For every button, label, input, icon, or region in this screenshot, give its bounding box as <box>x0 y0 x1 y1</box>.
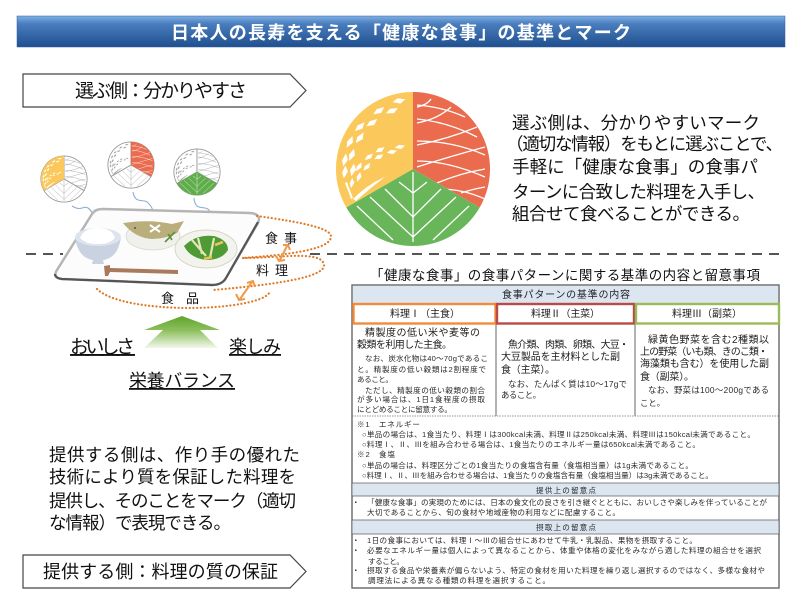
heading arrow: providing side: 提供する側：料理の質の保証 <box>43 562 278 582</box>
icon: green upward arrow <box>144 316 220 348</box>
column text: staple: ただし、精製度の低い穀類の割合 <box>365 385 485 395</box>
label: deliciousness: おいしさ <box>70 337 135 358</box>
column text: main dish: 食（主菜）。 <box>501 364 555 376</box>
text: intake notes: 調理法による異なる種類の料理を選択すること。 <box>368 575 550 585</box>
text: intake notes: ・ <box>352 536 360 545</box>
notes: energy and salt: ○料理Ⅰ、Ⅱ、Ⅲを組み合わせる場合は、1食当たりの食塩含有量（食塩相当量）は3g未満であること。 <box>362 470 713 480</box>
heading arrow: choosing side: 選ぶ側：分かりやすさ <box>75 80 247 102</box>
column text: side dish: 食（副菜）。 <box>640 371 694 383</box>
table header band <box>353 286 778 303</box>
main dish sector <box>413 92 490 208</box>
text: provision notes: 「健康な食事」の実現のためには、日本の食文化の良さを引き継ぐとともに、おいしさや楽しみを伴っていることが <box>367 497 767 507</box>
column text: side dish: 海藻類も含む）を使用した副 <box>640 357 769 370</box>
vegetable plate <box>175 230 237 268</box>
text: provision notes <box>352 497 767 517</box>
illustration: meal tray <box>55 209 259 285</box>
column text: staple: あること。 <box>357 375 393 384</box>
column text: main dish: あること。 <box>501 390 541 400</box>
column text: staple: 精製度の低い米や麦等の <box>365 326 480 339</box>
large healthy meal mark <box>336 92 490 246</box>
notes: energy and salt: ※1 エネルギー <box>357 420 420 429</box>
table heading: 「健康な食事」の食事パターンに関する基準の内容と留意事項 <box>370 267 760 283</box>
text block: choosing side: （適切な情報）をもとに選ぶことで、 <box>506 134 783 154</box>
icon: main dish mark <box>108 142 154 188</box>
text block: choosing side: 組合せて食べることができる。 <box>512 204 750 224</box>
title bar: 日本人の長寿を支える「健康な食事」の基準とマーク <box>171 22 631 43</box>
connector lines from marks to dishes <box>72 192 212 232</box>
column text: side dish <box>640 333 769 408</box>
column head: staple: 料理Ⅰ（主食） <box>390 307 460 320</box>
dotted loops: food, dish, meal <box>97 216 331 308</box>
tray <box>55 209 259 285</box>
text: intake notes: ・ <box>352 546 360 555</box>
label: nutrition balance: 栄養バランス <box>129 371 235 391</box>
text block: choosing side <box>506 113 783 224</box>
label: food: 食 品 <box>161 291 199 306</box>
text block: providing side <box>49 445 300 533</box>
column text: side dish: 上の野菜（いも類、きのこ類・ <box>640 346 768 358</box>
standards table <box>352 285 779 588</box>
text block: providing side: 提供し、そのことをマーク（適切 <box>49 491 296 511</box>
text: intake notes: すること。 <box>368 557 404 566</box>
column head: staple <box>354 304 496 324</box>
label: dish: 料 理 <box>256 263 288 278</box>
band: provision notes: 提供上の留意点 <box>536 485 596 495</box>
text block: choosing side: 手軽に「健康な食事」の食事パ <box>512 157 758 177</box>
label: meal: 食 事 <box>265 231 297 246</box>
column text: main dish <box>501 338 629 400</box>
column text: main dish: 魚介類、肉類、卵類、大豆・ <box>508 338 629 351</box>
column text: side dish: なお、野菜は100～200gである <box>648 385 769 395</box>
marks: three small logos <box>41 142 220 202</box>
side dish sector <box>346 169 480 246</box>
band: intake notes: 摂取上の留意点 <box>536 522 596 532</box>
text: intake notes: 1日の食事においては、料理Ⅰ～Ⅲの組合せにあわせて牛乳・乳製品、果物を摂取すること。 <box>367 535 697 545</box>
column text: staple: なお、炭水化物は40～70gであるこ <box>365 353 488 363</box>
column head: side dish <box>636 304 779 324</box>
grilled fish plate <box>123 221 184 250</box>
text block: providing side: 提供する側は、作り手の優れた <box>49 445 300 465</box>
text: intake notes <box>352 535 765 585</box>
heading arrow: choosing side <box>23 74 306 107</box>
rice sector <box>336 92 413 208</box>
bowl of rice <box>75 228 121 264</box>
notes: energy and salt: ※2 食塩 <box>357 449 395 459</box>
column head: main dish: 料理Ⅱ（主菜） <box>531 307 600 320</box>
text block: choosing side: ターンに合致した料理を入手し、 <box>512 182 765 202</box>
icon: side dish mark <box>174 149 220 195</box>
text: intake notes: 摂取する食品や栄養素が偏らないよう、特定の食材を用いた料理を繰り返し選択するのではなく、多様な食材や <box>367 565 765 575</box>
column text: side dish: 緑黄色野菜を含む2種類以 <box>648 333 769 346</box>
table header band: 食事パターンの基準の内容 <box>502 288 630 301</box>
band: provision notes <box>352 483 779 496</box>
column text: staple: と。精製度の低い穀類は2割程度で <box>357 364 486 374</box>
notes: energy and salt: ○単品の場合は、料理区分ごとの1食当たりの食塩含有量（食塩相当量）は1g未満であること。 <box>362 460 693 470</box>
column text: staple: が多い場合は、1日1食程度の摂取 <box>357 394 485 404</box>
column text: staple: 穀類を利用した主食。 <box>357 338 452 351</box>
column head: side dish: 料理Ⅲ（副菜） <box>672 307 742 320</box>
column text: main dish: 大豆製品を主材料とした副 <box>501 350 620 363</box>
column head: main dish <box>497 304 634 324</box>
text block: choosing side: 選ぶ側は、分かりやすいマーク <box>512 113 760 133</box>
notes: energy and salt <box>357 420 755 480</box>
column text: staple <box>357 326 488 414</box>
double arrows between levels <box>236 245 290 300</box>
chopsticks <box>104 265 178 276</box>
column text: side dish: こと。 <box>640 398 665 408</box>
heading arrow: providing side <box>23 555 306 588</box>
band: intake notes <box>352 520 779 534</box>
text block: providing side: な情報）で表現できる。 <box>49 513 231 533</box>
icon: staple food mark <box>41 156 87 202</box>
text: provision notes: 大切であることから、旬の食材や地域産物の利用などに配慮すること。 <box>367 507 620 517</box>
text block: providing side: 技術により質を保証した料理を <box>49 467 296 487</box>
title bar <box>17 16 785 47</box>
notes: energy and salt: ○単品の場合は、1食当たり、料理Ⅰは300kcal未満、料理Ⅱは250kcal未満、料理Ⅲは150kcal未満であること。 <box>362 429 755 439</box>
text: intake notes: 必要なエネルギー量は個人によって異なることから、体重や体格の変化をみながら適した料理の組合せを選択 <box>367 545 761 555</box>
text: provision notes: ・ <box>352 498 360 507</box>
notes: energy and salt: ○料理Ⅰ、Ⅱ、Ⅲを組み合わせる場合は、1食当たりのエネルギー量は650kcal未満であること。 <box>362 439 700 449</box>
label: enjoyment: 楽しみ <box>229 337 281 357</box>
column text: staple: にとどめることに留意する。 <box>357 404 452 414</box>
text: intake notes: ・ <box>352 566 360 575</box>
column text: main dish: なお、たんぱく質は10～17gで <box>508 379 627 389</box>
